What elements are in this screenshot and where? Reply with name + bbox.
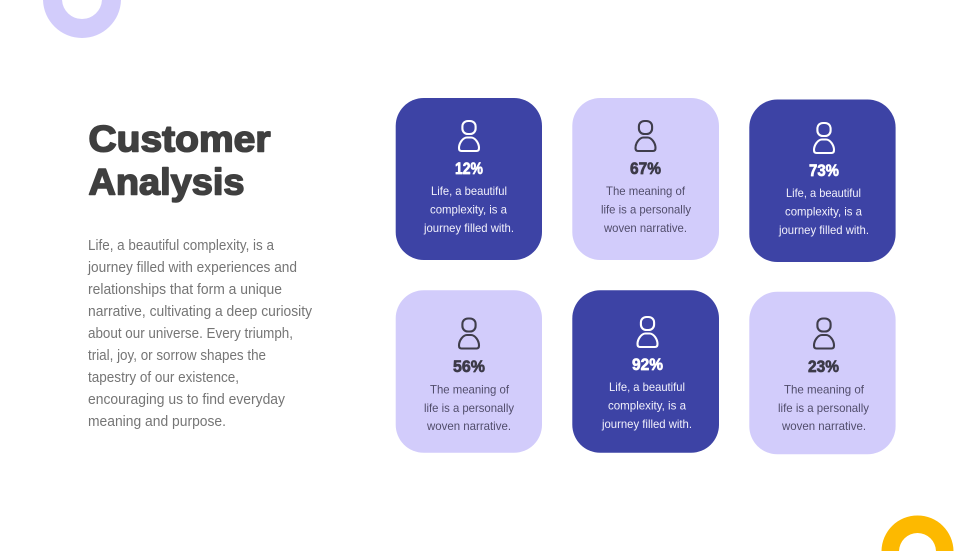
body paragraph: narrative, cultivating a deep curiosity bbox=[88, 304, 313, 320]
card: 12% bbox=[396, 98, 542, 260]
card: 56%: woven narrative. bbox=[426, 419, 511, 433]
card: 92%: Life, a beautiful bbox=[609, 380, 685, 394]
card: 92%: complexity, is a bbox=[608, 398, 686, 412]
body paragraph: relationships that form a unique bbox=[88, 282, 282, 298]
card: 56%: The meaning of bbox=[430, 382, 510, 396]
card: 23% bbox=[749, 292, 896, 454]
title: Analysis bbox=[88, 162, 244, 202]
card: 12%: Life, a beautiful bbox=[431, 184, 507, 198]
card: 23%: 23% bbox=[808, 358, 839, 376]
card: 73%: 73% bbox=[809, 162, 839, 180]
card: 92%: 92% bbox=[632, 356, 663, 374]
decorative ring: lavender top left bbox=[43, 0, 121, 38]
card: 23%: woven narrative. bbox=[781, 419, 866, 433]
card: 73%: journey filled with. bbox=[778, 223, 869, 237]
title: Customer bbox=[88, 118, 270, 160]
card: 73% bbox=[749, 100, 896, 262]
card: 12%: complexity, is a bbox=[430, 202, 507, 216]
body paragraph: encouraging us to find everyday bbox=[88, 392, 286, 408]
card: 56%: 56% bbox=[453, 358, 485, 376]
card: 67%: life is a personally bbox=[601, 202, 691, 216]
body paragraph: journey filled with experiences and bbox=[87, 260, 297, 276]
card: 92%: journey filled with. bbox=[601, 417, 692, 431]
body paragraph: tapestry of our existence, bbox=[88, 370, 239, 386]
card: 73%: Life, a beautiful bbox=[786, 186, 861, 200]
card: 23%: life is a personally bbox=[778, 401, 869, 415]
card: 56% bbox=[396, 290, 542, 453]
card: 67%: 67% bbox=[630, 160, 661, 178]
body paragraph: meaning and purpose. bbox=[88, 414, 226, 430]
body paragraph: Life, a beautiful complexity, is a bbox=[88, 238, 275, 254]
card: 12%: 12% bbox=[455, 160, 483, 178]
body paragraph: about our universe. Every triumph, bbox=[88, 326, 293, 342]
card: 67% bbox=[572, 98, 719, 260]
body paragraph bbox=[87, 238, 313, 430]
title bbox=[88, 118, 270, 202]
card: 12%: journey filled with. bbox=[423, 221, 514, 235]
card: 92% bbox=[572, 290, 719, 453]
card: 23%: The meaning of bbox=[784, 382, 865, 396]
card: 56%: life is a personally bbox=[424, 401, 514, 415]
card: 67%: woven narrative. bbox=[603, 221, 687, 235]
decorative ring: yellow bottom right bbox=[882, 515, 953, 551]
body paragraph: trial, joy, or sorrow shapes the bbox=[88, 348, 266, 364]
card: 67%: The meaning of bbox=[606, 184, 686, 198]
card: 73%: complexity, is a bbox=[785, 204, 862, 218]
